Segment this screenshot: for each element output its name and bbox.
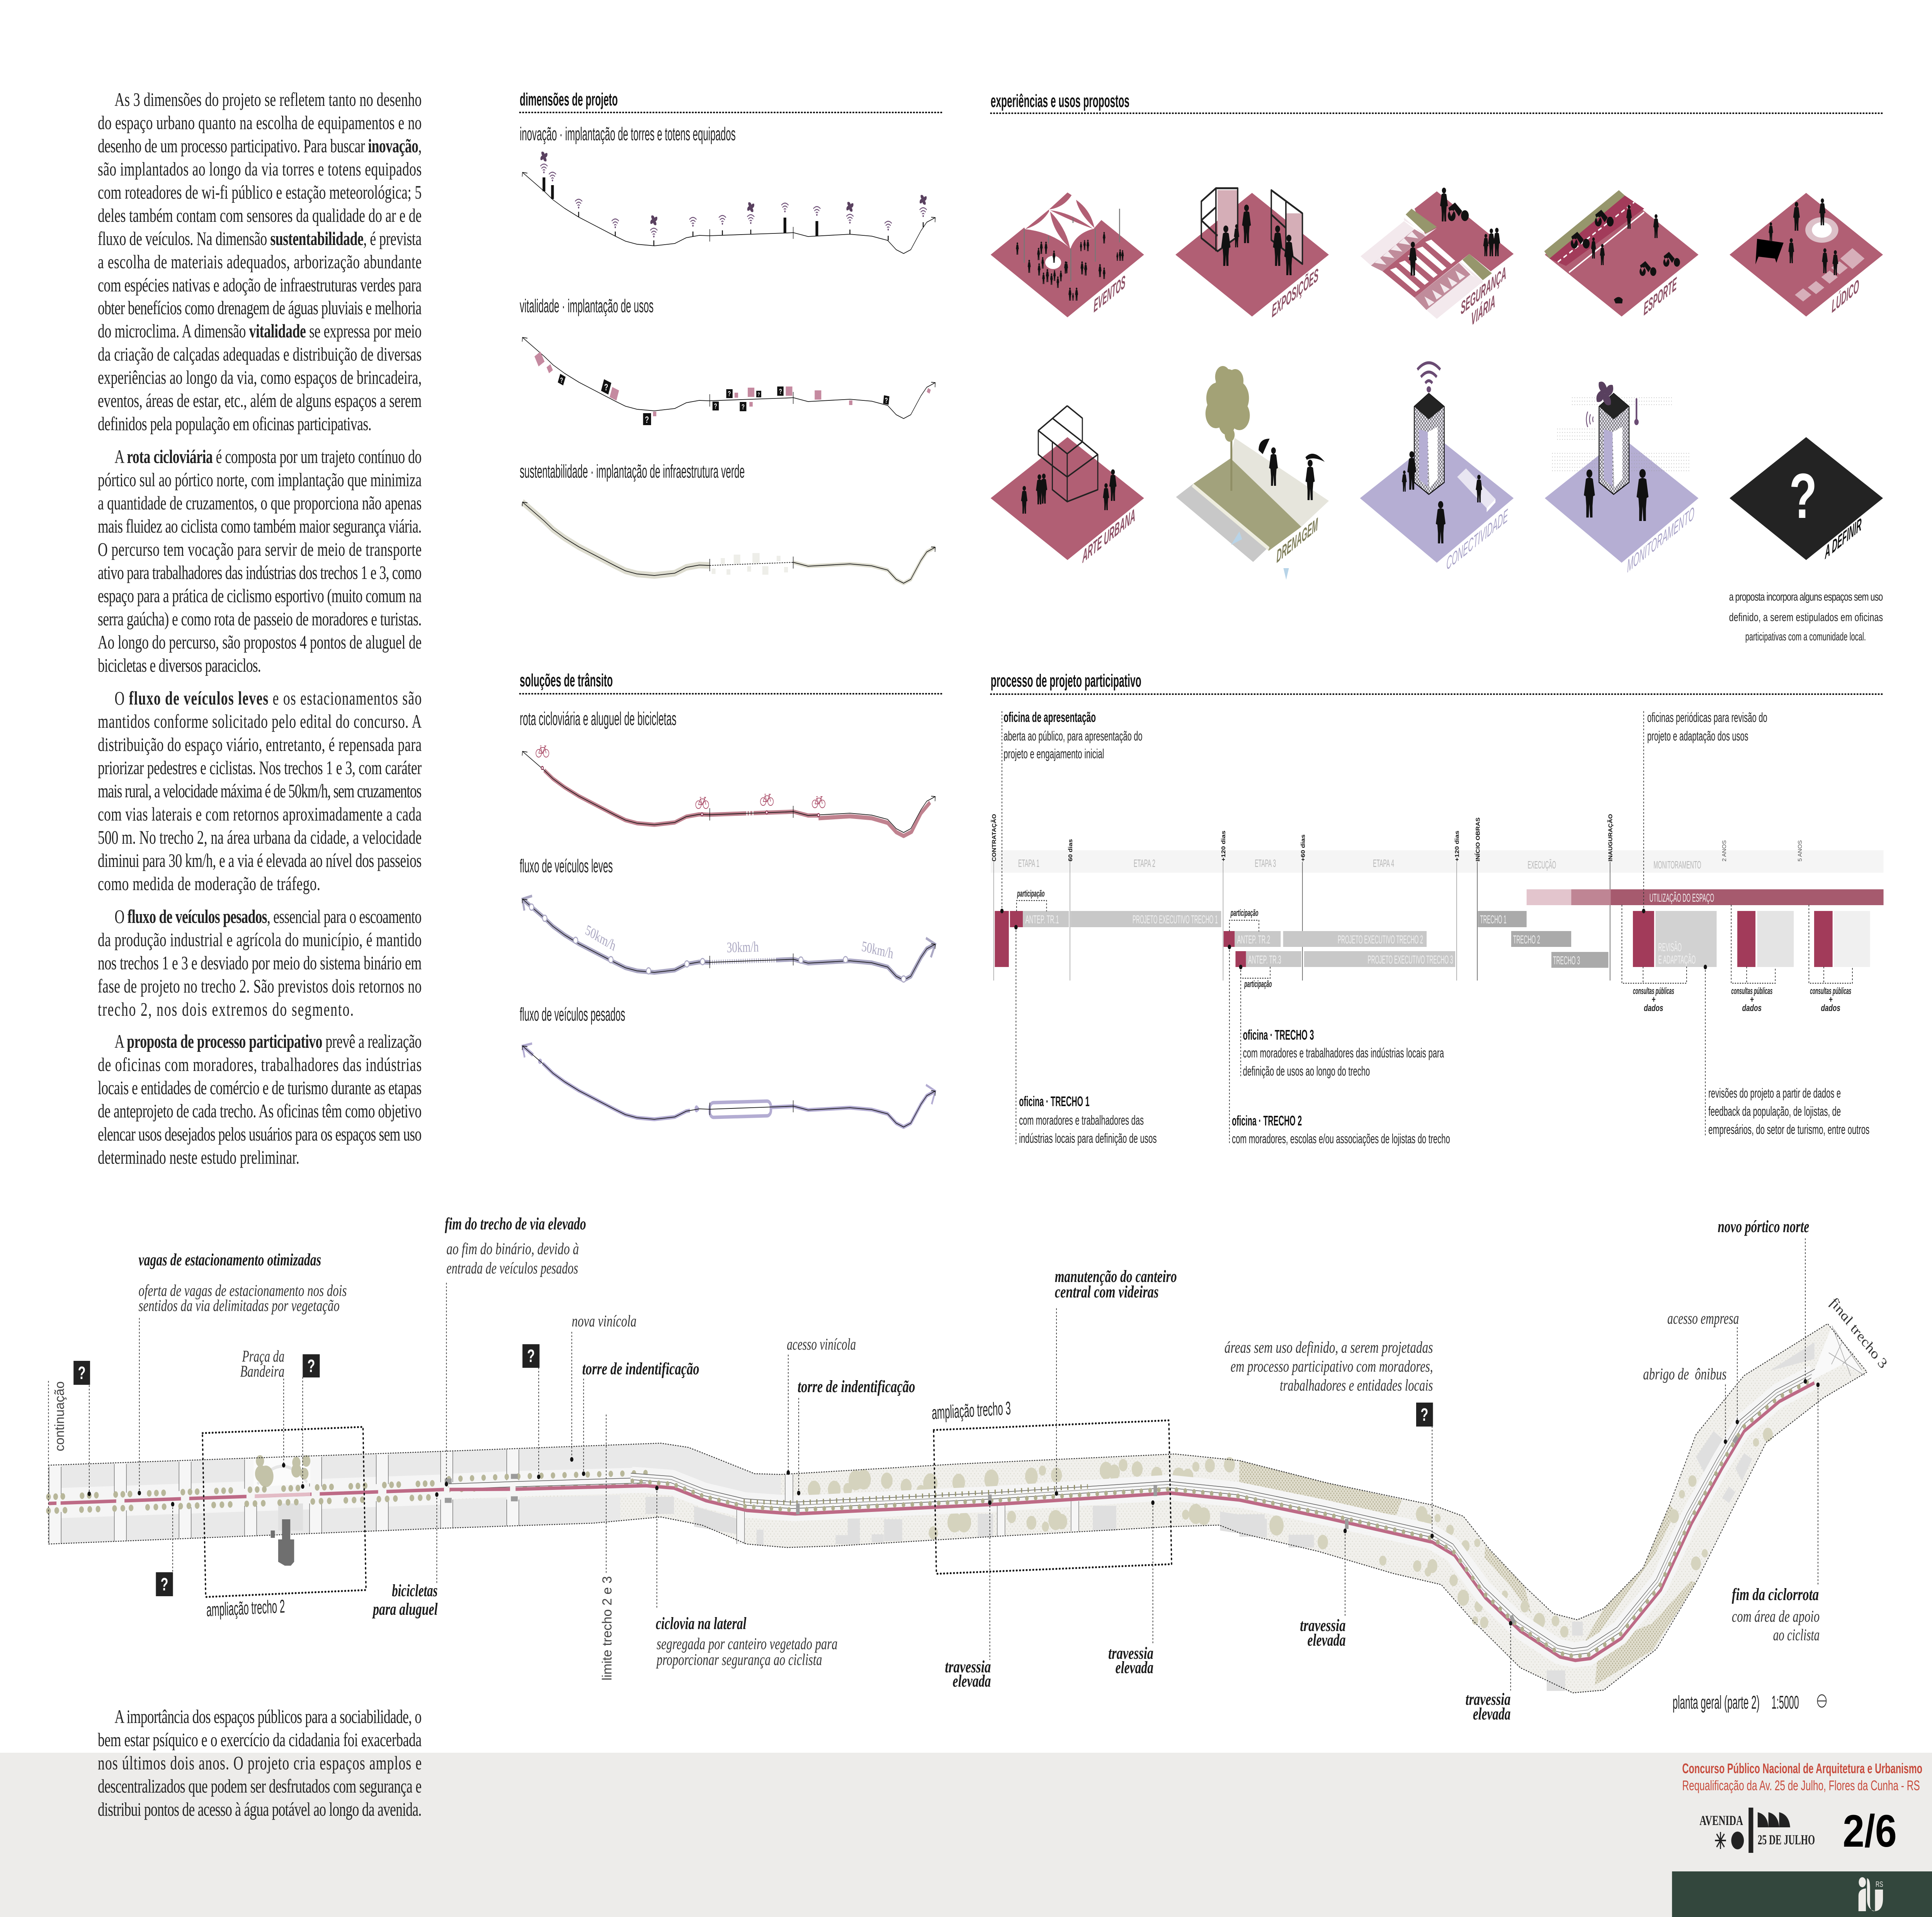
- callout: fim do trecho de via elevado: ao fim do binário, devido à: [446, 1240, 579, 1258]
- stage labels: MONITORAMENTO: [1653, 859, 1701, 871]
- note: oficina de apresentação: [1003, 710, 1143, 761]
- text block: public spaces: nos últimos dois anos. O projeto cria espaços amplos e: [98, 1752, 422, 1774]
- note: oficina trecho 2: [1232, 1113, 1450, 1146]
- public consultation labels: +: [1829, 994, 1833, 1005]
- caption: a definir note: a proposta incorpora alguns espaços sem uso: [1729, 590, 1883, 603]
- text block: cycling route: a quantidade de cruzamentos, o que proporciona não apenas: [98, 492, 422, 514]
- text block: light vehicles: mais rural, a velocidade máxima é de 50km/h, sem cruzamentos: [98, 780, 422, 802]
- box: ampliação trecho 3: [934, 1420, 1172, 1574]
- participation connectors: [1017, 901, 1852, 983]
- stage labels: EXECUÇÃO: [1528, 859, 1556, 871]
- question badge 3: ?: [527, 1347, 535, 1366]
- text block: cycling route: bicicletas e diversos paraciclos.: [98, 655, 261, 676]
- participation labels: participação: [1017, 889, 1045, 899]
- stage labels: ETAPA 2: [1134, 858, 1155, 870]
- bars: construction: TRECHO 3: [1553, 953, 1580, 967]
- bars: construction: TRECHO 1: [1480, 913, 1507, 926]
- bars: project stages: ANTEP. TR.3: [1248, 953, 1281, 966]
- note: oficina de apresentação: aberta ao público, para apresentação do: [1003, 729, 1143, 744]
- bars: monitoring: E ADAPTAÇÃO: [1658, 953, 1696, 966]
- map: final junction: [1810, 1326, 1865, 1381]
- map: road corridor surface: [48, 1377, 1813, 1655]
- stage labels: [1018, 858, 1701, 871]
- text block: public spaces: distribui pontos de acesso à água potável ao longo da avenida.: [98, 1799, 422, 1820]
- question badge 4: ?: [161, 1575, 168, 1594]
- callout: torre de indentificação 2: torre de indentificação: [798, 1377, 915, 1396]
- map: corridor base: [48, 1324, 1867, 1693]
- callout: vagas de estacionamento: [139, 1251, 347, 1314]
- icon: eventos: EVENTOS: [1094, 271, 1125, 317]
- callout: fim do trecho de via elevado: [445, 1215, 586, 1277]
- map: buildings: [646, 1342, 1815, 1691]
- bars: project stages: [995, 911, 1455, 967]
- footer green block: [1672, 1871, 1932, 1917]
- text block: public spaces: descentralizados que podem ser desfrutados com segurança e: [98, 1776, 422, 1797]
- icon: arte urbana: [991, 406, 1144, 567]
- subheading: vitalidade: vitalidade · implantação de usos: [520, 295, 653, 316]
- map: leader lines: [48, 1239, 1820, 1690]
- footer: page number: 2/6: [1843, 1805, 1897, 1856]
- text block: participatory process: [98, 1031, 422, 1168]
- caption: a definir note: [1729, 590, 1883, 643]
- callout: praça da bandeira: Bandeira: [240, 1362, 284, 1380]
- diagram: uses: ?: [742, 403, 745, 411]
- text block: cycling route: A rota cicloviária é composta por um trajeto contínuo do: [115, 446, 422, 468]
- callout: manutenção do canteiro: central com videiras: [1055, 1283, 1159, 1301]
- callout: torre de indentificação: torre de indentificação: [582, 1360, 699, 1378]
- note: oficinas periódicas: projeto e adaptação dos usos: [1647, 729, 1748, 744]
- subheading: rota cicloviária: rota cicloviária e aluguel de bicicletas: [520, 708, 677, 729]
- callout: praça da bandeira: [240, 1347, 284, 1380]
- callout: fim do trecho de via elevado: entrada de veículos pesados: [446, 1259, 578, 1277]
- diagram: uses: ?: [604, 382, 608, 393]
- text block: light vehicles: 500 m. No trecho 2, na área urbana da cidade, a velocidade: [98, 827, 422, 848]
- callout: fim da ciclorrota: [1732, 1585, 1820, 1644]
- callout: vagas de estacionamento: oferta de vagas de estacionamento nos dois: [139, 1282, 347, 1299]
- box: ampliação trecho 2: [202, 1427, 366, 1597]
- callout: bicicletas para aluguel: [372, 1582, 438, 1619]
- participation labels: [1017, 889, 1272, 989]
- note: oficina trecho 1: indústrias locais para definição de usos: [1019, 1131, 1157, 1146]
- callout: novo pórtico norte: novo pórtico norte: [1718, 1217, 1809, 1236]
- public consultation labels: consultas públicas: [1810, 986, 1851, 996]
- text block: light vehicles: diminui para 30 km/h, e a via é elevada ao nível dos passeios: [98, 850, 422, 872]
- callout: bicicletas para aluguel: bicicletas: [392, 1582, 438, 1600]
- text block: cycling route: O percurso tem vocação para servir de meio de transporte: [98, 539, 422, 560]
- public consultation labels: dados: [1644, 1003, 1663, 1013]
- footer background band: [0, 1753, 1932, 1917]
- label: ampliação trecho 2: ampliação trecho 2: [206, 1595, 285, 1620]
- icon: monitoramento: MONITORAMENTO: [1627, 502, 1694, 577]
- milestone labels: INAUGURAÇÃO: [1607, 814, 1614, 861]
- note: oficina trecho 1: oficina · TRECHO 1: [1019, 1094, 1090, 1109]
- text block: project dimensions: [98, 89, 422, 435]
- stage labels: ETAPA 4: [1373, 858, 1394, 870]
- callout: travessia elevada 1: [945, 1658, 991, 1691]
- callout: travessia elevada 3: [1300, 1616, 1346, 1650]
- text block: heavy vehicles: trecho 2, nos dois extremos do segmento.: [98, 999, 354, 1020]
- icon: a definir: [1730, 437, 1883, 564]
- callout: áreas sem uso definido: áreas sem uso definido, a serem projetadas: [1225, 1338, 1433, 1356]
- question badge 5: [1416, 1403, 1433, 1427]
- text block: project dimensions: com espécies nativas e adoção de infraestruturas verdes para: [98, 274, 422, 296]
- icon: exposições: [1175, 188, 1329, 322]
- bars: project stages: PROJETO EXECUTIVO TRECHO 2: [1338, 933, 1423, 946]
- speed label 30km/h: 30km/h: [727, 939, 759, 956]
- text block: project dimensions: deles também contam com sensores da qualidade do ar e de: [98, 205, 422, 226]
- callout: travessia elevada 2: [1108, 1644, 1153, 1677]
- icon: arte urbana: ARTE URBANA: [1082, 505, 1135, 567]
- text block: heavy vehicles: [98, 906, 422, 1020]
- text block: project dimensions: a escolha de materiais adequados, arborização abundante: [98, 251, 422, 273]
- text block: project dimensions: da criação de calçadas adequadas e distribuição de diversas: [98, 344, 422, 365]
- note: oficina trecho 3: [1243, 1027, 1444, 1079]
- subheading: veículos pesados: fluxo de veículos pesados: [520, 1004, 625, 1025]
- map: trees: [808, 1428, 1773, 1638]
- text block: project dimensions: obter benefícios como drenagem de águas pluviais e melhoria: [98, 297, 422, 319]
- question badge 1: [73, 1361, 90, 1385]
- general plan map: [48, 1215, 1889, 1723]
- callout: vagas de estacionamento: vagas de estacionamento otimizadas: [139, 1251, 321, 1269]
- text block: light vehicles: O fluxo de veículos leves e os estacionamentos são: [115, 688, 422, 709]
- note: oficina trecho 3: com moradores e trabalhadores das indústrias locais para: [1243, 1046, 1444, 1061]
- bars: project stages: PROJETO EXECUTIVO TRECHO 3: [1368, 953, 1453, 966]
- text block: participatory process: determinado neste estudo preliminar.: [98, 1147, 299, 1168]
- text block: heavy vehicles: da produção industrial e agrícola do município, é mantido: [98, 929, 422, 951]
- callout: ciclovia na lateral: proporcionar segurança ao ciclista: [656, 1651, 822, 1668]
- question badge 4: [156, 1572, 173, 1596]
- label: final trecho 3: final trecho 3: [1828, 1293, 1889, 1373]
- diagram: uses: [522, 337, 935, 425]
- callout: travessia elevada 3: travessia: [1300, 1616, 1346, 1635]
- icon: conectividade: [1360, 363, 1514, 574]
- text block: project dimensions: são implantados ao longo da via torres e totens equipados: [98, 158, 422, 180]
- callout: vagas de estacionamento: sentidos da via delimitadas por vegetação: [139, 1297, 340, 1314]
- panel: project dimensions: [520, 90, 943, 583]
- public consultation labels: +: [1651, 994, 1655, 1005]
- heading: soluções de trânsito: soluções de trânsito: [520, 671, 613, 690]
- icon: lúdico: LÚDICO: [1832, 275, 1859, 317]
- note: revisões do projeto: [1708, 1086, 1869, 1137]
- text block: cycling route: pórtico sul ao pórtico norte, com implantação que minimiza: [98, 469, 422, 491]
- text block: project dimensions: fluxo de veículos. Na dimensão sustentabilidade, é prevista: [98, 228, 422, 250]
- text block: cycling route: serra gaúcha) e como rota de passeio de moradores e turistas.: [98, 608, 422, 630]
- diagram: heavy vehicle flow: [522, 1044, 935, 1127]
- note: revisões do projeto: feedback da população, de lojistas, de: [1708, 1104, 1841, 1119]
- note: oficina trecho 1: [1019, 1094, 1157, 1146]
- icon: esporte: [1544, 190, 1699, 320]
- text block: participatory process: de oficinas com moradores, trabalhadores das indústrias: [98, 1054, 422, 1076]
- note: revisões do projeto: empresários, do setor de turismo, entre outros: [1708, 1122, 1869, 1137]
- callout: praça da bandeira: Praça da: [242, 1347, 284, 1365]
- callout: travessia elevada 4: travessia: [1466, 1690, 1510, 1709]
- text block: cycling route: mais fluidez ao ciclista como também maior segurança viária.: [98, 516, 422, 537]
- footer: avenida 25 de julho logo: 25 DE JULHO: [1758, 1832, 1815, 1847]
- panel: experiences and proposed uses: [991, 92, 1884, 643]
- text block: light vehicles: como medida de moderação de tráfego.: [98, 873, 320, 895]
- text block: participatory process: elencar usos desejados pelos usuários para os espaços sem uso: [98, 1124, 422, 1145]
- text block: light vehicles: com vias laterais e com retornos aproximadamente a cada: [98, 804, 422, 825]
- label: limite trecho 2 e 3: limite trecho 2 e 3: [599, 1576, 614, 1680]
- text block: light vehicles: mantidos conforme solicitado pelo edital do concurso. A: [98, 711, 422, 732]
- milestone vertical lines: [994, 862, 1457, 981]
- diagram: uses: ?: [779, 388, 782, 396]
- text block: public spaces: A importância dos espaços públicos para a sociabilidade, o: [115, 1706, 422, 1728]
- text block: project dimensions: desenho de um processo participativo. Para buscar inovação,: [98, 135, 422, 157]
- note: oficina trecho 1: com moradores e trabalhadores das: [1019, 1113, 1144, 1128]
- callout: fim do trecho de via elevado: fim do trecho de via elevado: [445, 1215, 586, 1233]
- map: trees beside cycle path: [632, 1379, 1813, 1657]
- callout: travessia elevada 4: [1466, 1690, 1510, 1723]
- stage labels: ETAPA 3: [1255, 858, 1276, 870]
- bars: monitoring: REVISÃO: [1658, 940, 1682, 954]
- text block: participatory process: locais e entidades de comércio e de turismo durante as etapas: [98, 1077, 422, 1099]
- callout: travessia elevada 1: travessia: [945, 1658, 991, 1676]
- heading: experiências e usos propostos: experiências e usos propostos: [991, 92, 1129, 111]
- diagram: cycle route: [522, 746, 935, 836]
- process leader lines: [1000, 712, 1707, 1144]
- map: vineyard median: [743, 1486, 1088, 1503]
- caption: planta geral and scale: 1:5000: [1771, 1692, 1799, 1713]
- callout: travessia elevada 3: elevada: [1307, 1631, 1346, 1650]
- subheading: inovação: inovação · implantação de torres e totens equipados: [520, 123, 736, 144]
- text block: light vehicles: priorizar pedestres e ciclistas. Nos trechos 1 e 3, com caráter: [98, 757, 422, 779]
- speed label 50km/h: 50km/h: [583, 922, 617, 954]
- question badge 3: [522, 1344, 539, 1368]
- map: trees along road: [48, 1473, 646, 1511]
- callout: fim da ciclorrota: fim da ciclorrota: [1732, 1585, 1819, 1604]
- subheading: veículos leves: fluxo de veículos leves: [520, 855, 613, 876]
- public consultation labels: [1633, 986, 1851, 1013]
- participation labels: participação: [1230, 908, 1259, 918]
- note: oficina trecho 2: com moradores, escolas e/ou associações de lojistas do trecho: [1232, 1132, 1450, 1146]
- bar: utilização do espaço: [1527, 889, 1884, 905]
- callout: acesso vinícola: acesso vinícola: [787, 1335, 856, 1353]
- icon: exposições: EXPOSIÇÕES: [1272, 264, 1318, 322]
- note: oficina trecho 2: oficina · TRECHO 2: [1232, 1113, 1302, 1129]
- icon: monitoramento: [1545, 381, 1699, 577]
- callout: fim da ciclorrota: com área de apoio: [1732, 1607, 1820, 1625]
- icon: lúdico: [1730, 193, 1883, 317]
- milestone labels: [990, 814, 1803, 861]
- text block: heavy vehicles: nos trechos 1 e 3 e desviado por meio do sistema binário em: [98, 952, 422, 974]
- text block: heavy vehicles: fase de projeto no trecho 2. São previstos dois retornos no: [98, 976, 422, 997]
- bars: monitoring: [1633, 911, 1870, 967]
- bars: project stages: ANTEP. TR.2: [1237, 933, 1270, 946]
- public consultation labels: consultas públicas: [1633, 986, 1674, 996]
- map: praça da bandeira: [253, 1454, 310, 1531]
- label: ampliação trecho 3: ampliação trecho 3: [932, 1398, 1011, 1423]
- text block: public spaces: [98, 1706, 422, 1820]
- map: raised crossings: [445, 1437, 1737, 1623]
- heading: dimensões de projeto: dimensões de projeto: [520, 90, 618, 109]
- diagram: light vehicle flow: [522, 896, 935, 982]
- question badge 5: ?: [1420, 1405, 1428, 1425]
- footer: avenida 25 de julho logo: AVENIDA: [1699, 1813, 1743, 1828]
- callout: manutenção do canteiro: manutenção do canteiro: [1055, 1267, 1177, 1286]
- icon: segurança viária: VIÁRIA: [1471, 290, 1495, 330]
- text block: light vehicles: distribuição do espaço viário, entretanto, é repensada para: [98, 734, 422, 756]
- map: dense vegetation zones: [1239, 1461, 1696, 1685]
- text block: participatory process: A proposta de processo participativo prevê a realização: [115, 1031, 422, 1052]
- diagram: uses: ?: [885, 397, 888, 405]
- map: cycle path: [48, 1383, 1815, 1660]
- icon: a definir: ?: [1789, 460, 1817, 532]
- text block: heavy vehicles: O fluxo de veículos pesados, essencial para o escoamento: [115, 906, 422, 928]
- question badge 1: ?: [78, 1364, 86, 1383]
- milestone labels: 60 dias: [1067, 839, 1073, 861]
- icon: drenagem: [1176, 366, 1329, 580]
- timeline band: [991, 850, 1884, 873]
- caption: a definir note: participativas com a comunidade local.: [1745, 630, 1866, 643]
- bars: project stages: ANTEP. TR.1: [1026, 913, 1059, 926]
- text block: project dimensions: experiências ao longo da via, como espaços de brincadeira,: [98, 367, 422, 388]
- text block: cycling route: espaço para a prática de ciclismo esportivo (muito comum na: [98, 585, 422, 607]
- bar: utilização do espaço: UTILIZAÇÃO DO ESPAÇO: [1650, 891, 1714, 904]
- milestone labels: 5 ANOS: [1796, 840, 1803, 861]
- icon: eventos: [991, 189, 1144, 317]
- public consultation labels: dados: [1742, 1003, 1762, 1013]
- callout: travessia elevada 1: elevada: [952, 1672, 991, 1691]
- text block: participatory process: de anteprojeto de cada trecho. As oficinas têm como objetivo: [98, 1100, 422, 1122]
- public consultation labels: +: [1750, 994, 1754, 1005]
- text block: cycling route: [98, 446, 422, 676]
- caption: planta geral and scale: planta geral (parte 2): [1673, 1692, 1760, 1713]
- callout: nova vinícola: nova vinícola: [572, 1312, 636, 1330]
- bars: project stages: PROJETO EXECUTIVO TRECHO 1: [1133, 913, 1218, 926]
- text block: project dimensions: com roteadores de wi-fi público e estação meteorológica; 5: [98, 182, 422, 203]
- callout: acesso empresa: acesso empresa: [1667, 1309, 1739, 1327]
- note: oficina trecho 3: definição de usos ao longo do trecho: [1243, 1064, 1370, 1079]
- participation labels: participação: [1244, 979, 1272, 989]
- note: oficinas periódicas: oficinas periódicas para revisão do: [1647, 710, 1767, 725]
- map: road carriageways: [449, 1359, 1840, 1652]
- icon: esporte: ESPORTE: [1644, 273, 1677, 320]
- icon: a definir: A DEFINIR: [1825, 514, 1862, 564]
- diagram: green infrastructure: [522, 502, 935, 583]
- icon: church building: [271, 1519, 294, 1566]
- footer: competition title: [1682, 1761, 1922, 1793]
- heading: processo de projeto participativo: processo de projeto participativo: [991, 671, 1141, 691]
- callout: áreas sem uso definido: em processo participativo com moradores,: [1231, 1357, 1433, 1375]
- question badge 2: [303, 1354, 320, 1377]
- footer: competition title: Requalificação da Av. 25 de Julho, Flores da Cunha - RS: [1682, 1778, 1920, 1793]
- milestone labels: +60 dias: [1299, 834, 1306, 861]
- subheading: sustentabilidade: sustentabilidade · implantação de infraestrutura verde: [520, 461, 745, 482]
- panel: participatory design process: [990, 671, 1884, 1146]
- callout: áreas sem uso definido: [1225, 1338, 1433, 1394]
- map: corridor outline: [48, 1324, 1867, 1693]
- caption: a definir note: definido, a serem estipulados em oficinas: [1729, 610, 1883, 624]
- text block: cycling route: ativo para trabalhadores das indústrias dos trechos 1 e 3, como: [98, 562, 422, 584]
- callout: áreas sem uso definido: trabalhadores e entidades locais: [1280, 1376, 1433, 1394]
- callout: travessia elevada 2: elevada: [1116, 1658, 1153, 1677]
- callout: ciclovia na lateral: [656, 1614, 837, 1668]
- callout: ciclovia na lateral: segregada por canteiro vegetado para: [656, 1635, 837, 1653]
- diagram: uses: ?: [714, 403, 717, 410]
- icon: segurança viária: [1361, 187, 1514, 330]
- diagram: uses: ?: [758, 391, 760, 397]
- text block: public spaces: bem estar psíquico e o exercício da cidadania foi exacerbada: [98, 1729, 422, 1751]
- note: oficina trecho 3: oficina · TRECHO 3: [1243, 1027, 1314, 1043]
- callout: fim da ciclorrota: ao ciclista: [1773, 1626, 1820, 1644]
- icon: drenagem: DRENAGEM: [1277, 514, 1318, 567]
- text block: cycling route: Ao longo do percurso, são propostos 4 pontos de aluguel de: [98, 632, 422, 653]
- milestone labels: 2 ANOS: [1721, 840, 1727, 861]
- text block: light vehicles: [98, 688, 422, 895]
- icon: segurança viária: SEGURANÇA: [1461, 262, 1506, 319]
- milestone labels: INÍCIO OBRAS: [1475, 817, 1481, 861]
- footer: iau rs logo: [1859, 1877, 1883, 1911]
- text block: project dimensions: do microclima. A dimensão vitalidade se expressa por meio: [98, 320, 422, 342]
- callout: manutenção do canteiro: [1055, 1267, 1177, 1301]
- text block: project dimensions: eventos, áreas de estar, etc., além de alguns espaços a serem: [98, 390, 422, 412]
- note: oficinas periódicas: [1647, 710, 1767, 744]
- stage labels: ETAPA 1: [1018, 858, 1039, 870]
- diagram: uses: ?: [645, 415, 649, 425]
- note: revisões do projeto: revisões do projeto a partir de dados e: [1708, 1086, 1841, 1101]
- text block: project dimensions: As 3 dimensões do projeto se refletem tanto no desenho: [115, 89, 422, 111]
- note: oficina de apresentação: projeto e engajamento inicial: [1003, 747, 1104, 761]
- footer: avenida 25 de julho logo: [1699, 1808, 1815, 1853]
- diagram: uses: ?: [728, 390, 731, 398]
- diagram: uses: ?: [560, 377, 563, 385]
- callout: travessia elevada 2: travessia: [1108, 1644, 1153, 1663]
- bars: construction: [1478, 911, 1609, 968]
- milestone labels: +120 dias: [1454, 831, 1460, 861]
- milestone labels: CONTRATAÇÃO: [990, 814, 997, 861]
- bars: construction: TRECHO 2: [1513, 933, 1540, 946]
- speed label 50km/h right: 50km/h: [861, 938, 895, 962]
- question badge 2: ?: [307, 1357, 315, 1376]
- callout: ciclovia na lateral: ciclovia na lateral: [656, 1614, 747, 1633]
- icon: conectividade: CONECTIVIDADE: [1446, 505, 1508, 574]
- footer: iau rs logo: RS: [1876, 1880, 1883, 1889]
- milestone labels: +120 dias: [1220, 831, 1226, 861]
- map: cross streets: [49, 1449, 1079, 1544]
- panel: traffic solutions: [520, 671, 943, 1127]
- callout: abrigo de ônibus: abrigo de ônibus: [1643, 1365, 1726, 1383]
- text block: project dimensions: do espaço urbano quanto na escolha de equipamentos e no: [98, 112, 422, 134]
- text block: project dimensions: definidos pela população em oficinas participativas.: [98, 413, 372, 435]
- map: urban blocks: [48, 1443, 781, 1544]
- public consultation labels: dados: [1821, 1003, 1840, 1013]
- icon: north symbol: [1817, 1695, 1826, 1707]
- callout: travessia elevada 4: elevada: [1473, 1705, 1510, 1723]
- note: oficina de apresentação: oficina de apresentação: [1003, 710, 1096, 725]
- callout: bicicletas para aluguel: para aluguel: [372, 1600, 438, 1619]
- diagram: towers and totems: [522, 152, 935, 254]
- label: continuação: continuação: [52, 1381, 67, 1451]
- public consultation labels: consultas públicas: [1731, 986, 1772, 996]
